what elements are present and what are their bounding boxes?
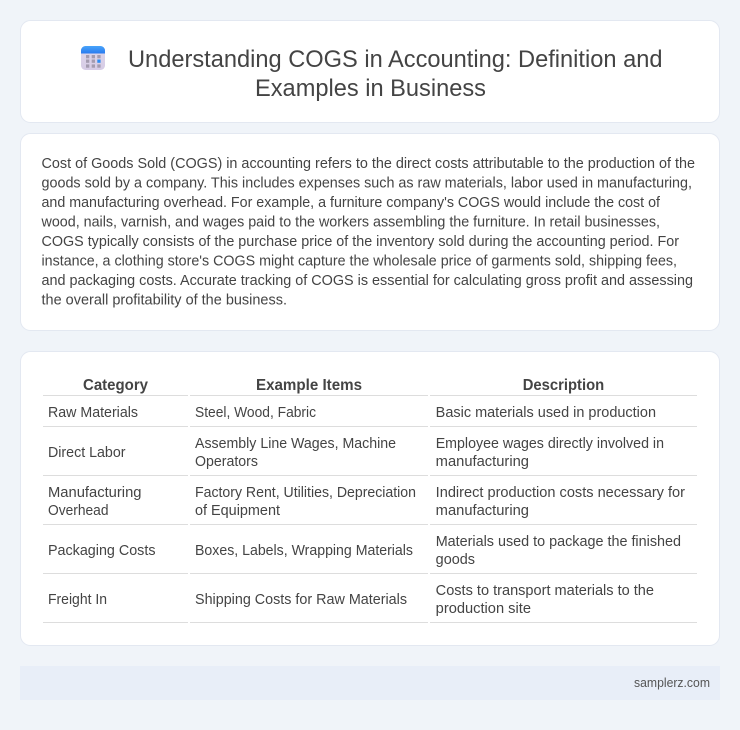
table row: Raw Materials: Steel, Wood, Fabric [195,405,316,421]
text block: COGS definition [41,156,695,308]
text block: COGS definition: instance, a clothing store's COGS might capture the wholesale price of garments sold, shipping fees, [42,254,677,270]
text block: COGS definition: goods sold by a company. This includes expenses such as raw materials, labor used in manufacturing, [42,176,692,192]
icon: calendar [81,46,105,70]
text block: COGS definition: and manufacturing overhead. For example, a furniture company's COGS would include the cost of [42,195,661,211]
table header: Example Items [256,377,362,394]
table row: Manufacturing Overhead [48,485,685,519]
table header: Description [523,377,604,394]
table row: Direct Labor: Operators [195,454,258,470]
table row: Packaging Costs: Materials used to package the finished [436,534,681,550]
table row: Direct Labor: Employee wages directly involved in [436,436,664,452]
table row: Direct Labor [48,436,664,470]
table row: Freight In [48,583,654,617]
table row: Raw Materials: Basic materials used in production [436,405,656,421]
panel: title header [20,20,720,122]
title: Examples in Business [255,75,486,102]
table row: Manufacturing Overhead: manufacturing [436,503,529,519]
table row: Raw Materials [48,405,656,421]
table row: Manufacturing Overhead: Manufacturing [48,485,142,501]
table row: Raw Materials: Raw Materials [48,405,138,421]
panel: intro paragraph [20,134,720,330]
title [128,46,662,102]
table row: Direct Labor: manufacturing [436,454,529,470]
text block: COGS definition: Cost of Goods Sold (COGS) in accounting refers to the direct costs attributable to the production of the [42,156,695,172]
table row: Manufacturing Overhead: of Equipment [195,503,280,519]
table row: Freight In: Shipping Costs for Raw Materials [195,592,407,608]
table row: Freight In: Costs to transport materials to the [436,583,654,599]
table row: Packaging Costs: Boxes, Labels, Wrapping Materials [195,543,413,559]
footer text: site name: samplerz.com [634,675,710,690]
title: Understanding COGS in Accounting: Definition and [128,46,662,73]
text block: COGS definition: the overall profitability of the business. [42,292,287,308]
table row: Freight In: production site [436,601,531,617]
table row: Manufacturing Overhead: Factory Rent, Utilities, Depreciation [195,485,416,501]
table row: Packaging Costs: Packaging Costs [48,543,156,559]
table row: Freight In: Freight In [48,592,107,608]
table row: Manufacturing Overhead: Indirect production costs necessary for [436,485,685,501]
table header [83,377,604,394]
text block: COGS definition: and packaging costs. Accurate tracking of COGS is essential for calculating gross profit and assessing [42,273,693,289]
table row: Direct Labor: Assembly Line Wages, Machine [195,436,396,452]
footer [20,666,720,700]
text block: COGS definition: COGS typically consists of the purchase price of the inventory sold during the accounting period. For [42,234,679,250]
table row: Direct Labor: Direct Labor [48,445,126,461]
text block: COGS definition: wood, nails, varnish, and wages paid to the workers assembling the furniture. In retail businesses, [41,214,660,230]
panel: COGS table [20,352,720,646]
table row: Manufacturing Overhead: Overhead [48,503,108,519]
table row: Packaging Costs: goods [436,552,475,568]
table row: Packaging Costs [48,534,681,568]
table header: Category [83,377,148,394]
